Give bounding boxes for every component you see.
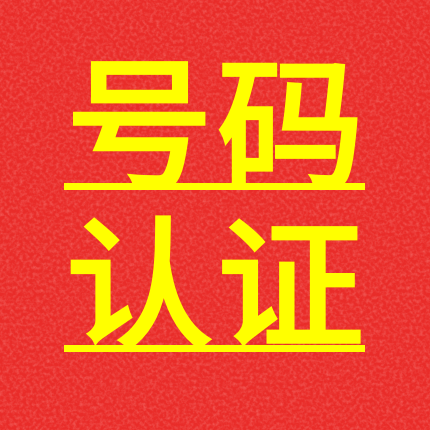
heading: 认证: 认证	[66, 209, 364, 366]
heading: 号码: 号码	[66, 49, 364, 206]
underline: bottom	[64, 345, 365, 352]
underline: top	[64, 183, 365, 190]
